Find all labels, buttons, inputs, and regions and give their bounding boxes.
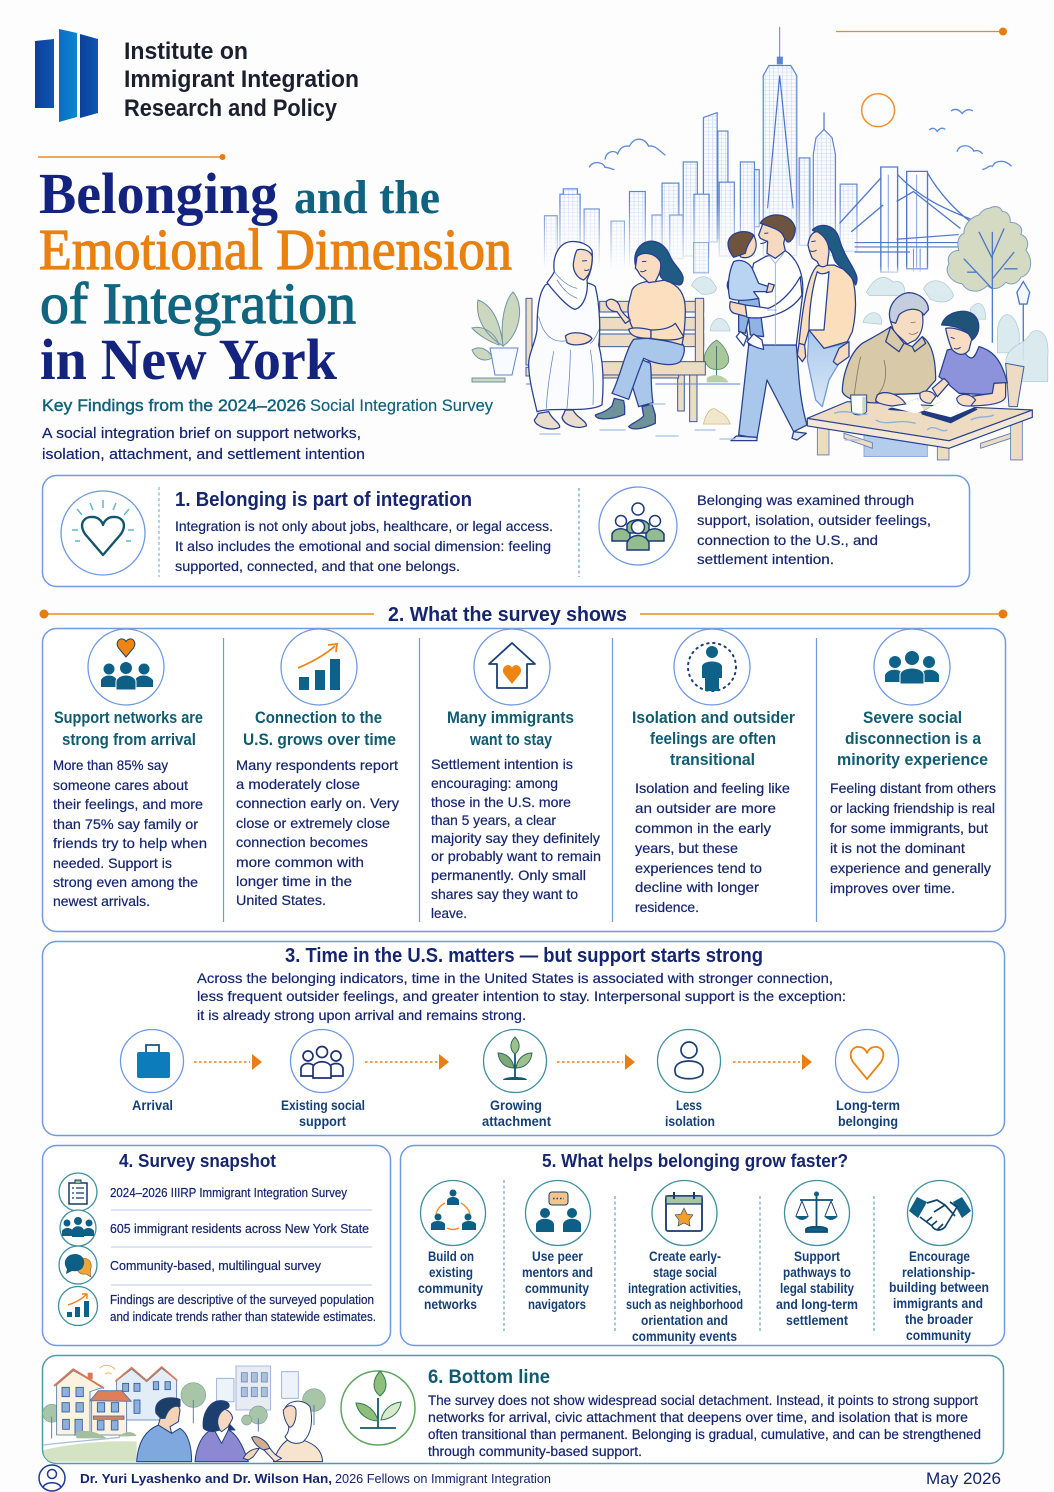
column: isolation is transitional: [632, 629, 796, 915]
heading: Connection to the: [255, 709, 382, 727]
body: newest arrivals.: [53, 893, 150, 909]
body: permanently. Only small: [431, 867, 586, 883]
item: early-stage activities: such as neighborhood: [626, 1297, 743, 1312]
body: encouraging: among: [431, 775, 558, 791]
icon: people with heart: [88, 629, 164, 705]
item: peer mentors: [522, 1180, 593, 1312]
item: survey name: 2024–2026 IIIRP Immigrant Integration Survey: [110, 1186, 348, 1200]
older man: [842, 293, 936, 406]
item: legal pathways: Support: [794, 1249, 840, 1264]
item: legal pathways: pathways to: [783, 1265, 851, 1280]
body: improves over time.: [830, 880, 955, 896]
top-right orange rule: [836, 28, 1007, 36]
panel 1: belonging is part of integration: [42, 476, 970, 586]
heading: [54, 709, 203, 749]
step: long-term belonging: Long-term: [836, 1098, 900, 1113]
heading: section 4: 4. Survey snapshot: [119, 1150, 276, 1171]
body: years, but these: [635, 840, 738, 856]
body: More than 85% say: [53, 757, 168, 773]
item: peer mentors: navigators: [528, 1297, 586, 1312]
title: [39, 161, 512, 392]
item: early-stage activities: community events: [632, 1329, 737, 1344]
heading: U.S. grows over time: [243, 731, 396, 749]
section 1 right text: connection to the U.S., and: [697, 532, 878, 548]
item: early-stage activities: [626, 1180, 743, 1344]
item: early-stage activities: orientation and: [641, 1313, 728, 1328]
title: in New York: [40, 327, 338, 392]
body: Isolation and feeling like: [635, 780, 790, 796]
heading: section 2 with orange rules: [40, 604, 1008, 626]
arrow: [194, 1054, 262, 1070]
section 1 right text: [697, 492, 931, 567]
step: long-term belonging: [836, 1030, 900, 1129]
hero illustration: New York skyline and people: [472, 27, 1048, 460]
panel 3: time in the U.S. matters: [42, 942, 1004, 1136]
item: early-stage activities: stage social: [653, 1265, 717, 1280]
item: sample size: 605 immigrant residents across New York State: [110, 1222, 369, 1236]
illustration: neighborhood and residents: [43, 1365, 325, 1462]
icon: rising bars: [281, 629, 357, 705]
intro text: [42, 425, 365, 463]
item: findings note: [58, 1286, 376, 1326]
heading: minority experience: [837, 751, 988, 769]
item: legal pathways: [776, 1180, 858, 1328]
logo wordmark: [124, 38, 359, 122]
section 1 body text: [175, 518, 553, 574]
heading: section 2 with orange rules: 2. What the survey shows: [388, 604, 627, 626]
heading: transitional: [670, 751, 755, 769]
body: more common with: [236, 854, 364, 870]
arrow: [365, 1054, 449, 1070]
body: or lacking friendship is real: [830, 800, 995, 816]
item: community-based survey: [59, 1246, 322, 1284]
item: build on networks: existing: [429, 1265, 473, 1280]
section 6 body text: through community-based support.: [428, 1444, 642, 1459]
section 3 body text: less frequent outsider feelings, and greater intention to stay. Interpersonal support is the exception:: [197, 988, 846, 1004]
step: growing attachment: [482, 1030, 551, 1129]
item: relationship-building: [889, 1180, 989, 1343]
column: connection grows: [236, 629, 399, 908]
body: United States.: [236, 892, 326, 908]
body: experiences tend to: [635, 860, 762, 876]
body: Feeling distant from others: [830, 780, 996, 796]
item: sample size: [60, 1210, 369, 1246]
step: growing attachment: attachment: [482, 1114, 551, 1129]
body: experience and generally: [830, 860, 991, 876]
body: needed. Support is: [53, 855, 172, 871]
icon: group of people: [599, 487, 677, 565]
authors: 2026 Fellows on Immigrant Integration: [335, 1472, 551, 1486]
item: legal pathways: legal stability: [780, 1281, 854, 1296]
title: Belonging: [39, 161, 278, 226]
body: connection becomes: [236, 834, 368, 850]
section 6 body text: networks for arrival, civic attachment that deepens over time, and isolation that is more: [428, 1410, 968, 1425]
column: support networks: [53, 629, 207, 909]
date: May 2026: [926, 1470, 1001, 1488]
step: less isolation: [658, 1030, 720, 1129]
heading: Support networks are: [54, 709, 203, 727]
item: relationship-building: Encourage: [909, 1249, 970, 1264]
heading: disconnection is a: [845, 730, 982, 748]
item: findings note: and indicate trends rather than statewide estimates.: [110, 1310, 376, 1324]
section 6 body text: The survey does not show widespread social detachment. Instead, it points to strong support: [428, 1393, 978, 1408]
icon: sprout: [341, 1371, 415, 1445]
heading: Many immigrants: [447, 709, 574, 727]
item: peer mentors: Use peer: [532, 1249, 584, 1264]
arrow: [557, 1054, 635, 1070]
item: build on networks: networks: [424, 1297, 477, 1312]
mother: [797, 225, 857, 407]
body: [236, 757, 399, 908]
body: friends try to help when: [53, 835, 207, 851]
item: findings note: Findings are descriptive of the surveyed population: [110, 1293, 374, 1307]
body: Settlement intention is: [431, 756, 573, 772]
body: [431, 756, 601, 921]
section 3 body text: [197, 970, 846, 1023]
item: peer mentors: community: [525, 1281, 589, 1296]
arrow: [733, 1054, 812, 1070]
subtitle: Social Integration Survey: [310, 396, 493, 415]
authors: [80, 1472, 551, 1486]
heading: want to stay: [469, 731, 553, 749]
houses: [54, 1367, 177, 1435]
step: arrival: [120, 1030, 184, 1113]
title: and the: [294, 171, 440, 224]
item: survey name: [59, 1173, 348, 1211]
residents: [137, 1398, 323, 1462]
heading: feelings are often: [650, 730, 776, 748]
body: or probably want to remain: [431, 848, 601, 864]
heading: Isolation and outsider: [632, 709, 796, 727]
logo wordmark: Immigrant Integration: [124, 66, 359, 93]
background buildings and trees: [217, 1366, 298, 1410]
section 3 body text: it is already strong upon arrival and remains strong.: [197, 1007, 526, 1023]
heading: section 5: 5. What helps belonging grow faster?: [542, 1150, 848, 1171]
logo wordmark: Institute on: [124, 38, 248, 65]
body: an outsider are more: [635, 800, 776, 816]
timeline: [120, 1030, 900, 1129]
panel 6: bottom line: [42, 1356, 1004, 1464]
icon: author: [39, 1465, 65, 1491]
section 1 body text: Integration is not only about jobs, healthcare, or legal access.: [175, 518, 553, 534]
heading: [243, 709, 396, 749]
boy: [932, 311, 1007, 406]
heading: section 3: 3. Time in the U.S. matters — but support starts strong: [285, 945, 763, 967]
section 6 body text: [428, 1393, 981, 1459]
seated women on bench: [526, 241, 740, 429]
item: community-based survey: Community-based, multilingual survey: [110, 1259, 322, 1273]
item: build on networks: Build on: [428, 1249, 474, 1264]
heading: section 6: 6. Bottom line: [428, 1367, 550, 1388]
body: for some immigrants, but: [830, 820, 988, 836]
body: [635, 780, 790, 915]
icon: three people: [874, 629, 950, 705]
top-left orange rule: [38, 154, 226, 160]
bench: [526, 298, 705, 422]
body: common in the early: [635, 820, 771, 836]
body: connection early on. Very: [236, 795, 399, 811]
section 1 right text: settlement intention.: [697, 551, 834, 567]
intro text: A social integration brief on support networks,: [42, 425, 361, 442]
step: less isolation: isolation: [665, 1114, 715, 1129]
body: it is not the dominant: [830, 840, 965, 856]
potted plant: [472, 292, 520, 382]
city backdrop: [544, 27, 1048, 424]
mother and reading pair at table: [797, 225, 1032, 460]
item: relationship-building: immigrants and: [893, 1296, 983, 1311]
column: severe disconnection: [830, 629, 996, 896]
step: existing social support: [281, 1030, 365, 1129]
body: Many respondents report: [236, 757, 398, 773]
item: early-stage activities: integration activities,: [628, 1281, 741, 1296]
heading: [837, 709, 988, 769]
item: early-stage activities: Create early-: [649, 1249, 721, 1264]
logo: institute: [35, 29, 359, 122]
item: build on networks: [418, 1180, 486, 1312]
step: existing social support: support: [299, 1114, 346, 1129]
step: growing attachment: Growing: [490, 1098, 542, 1113]
body: strong even among the: [53, 874, 198, 890]
heading: Severe social: [863, 709, 962, 727]
icon: glowing heart: [61, 491, 145, 575]
section 3 body text: Across the belonging indicators, time in the United States is associated with stronger connection,: [197, 970, 833, 986]
item: relationship-building: community: [906, 1328, 971, 1343]
section 1 body text: supported, connected, and that one belongs.: [175, 558, 460, 574]
item: relationship-building: relationship-: [902, 1265, 975, 1280]
title: Emotional Dimension: [39, 217, 512, 282]
body: their feelings, and more: [53, 796, 203, 812]
woman in hijab: [529, 241, 603, 429]
heading: [632, 709, 796, 769]
body: shares say they want to: [431, 886, 578, 902]
item: peer mentors: mentors and: [522, 1265, 593, 1280]
heading: [447, 709, 574, 749]
panel 2: what the survey shows: [42, 628, 1006, 932]
chair: [1006, 363, 1024, 407]
subtitle: [42, 396, 493, 415]
item: build on networks: community: [418, 1281, 483, 1296]
icon: house with heart: [474, 629, 550, 705]
body: majority say they definitely: [431, 830, 600, 846]
body: close or extremely close: [236, 815, 390, 831]
heading: strong from arrival: [62, 731, 196, 749]
step: arrival: Arrival: [132, 1098, 173, 1113]
body: leave.: [431, 905, 467, 921]
body: than 5 years, a clear: [431, 812, 556, 828]
body: [53, 757, 207, 909]
ground strokes: [540, 404, 860, 440]
section 1 right text: Belonging was examined through: [697, 492, 914, 508]
body: those in the U.S. more: [431, 794, 571, 810]
authors: Dr. Yuri Lyashenko and Dr. Wilson Han,: [80, 1472, 332, 1486]
step: existing social support: Existing social: [281, 1098, 365, 1113]
body: than 75% say family or: [53, 816, 198, 832]
footer: [39, 1465, 1001, 1491]
step: less isolation: Less: [676, 1098, 702, 1113]
body: someone cares about: [53, 777, 188, 793]
title: of Integration: [40, 271, 356, 336]
table legs and chairs: [817, 422, 1022, 460]
heading: section 1: 1. Belonging is part of integration: [175, 489, 472, 511]
body: longer time in the: [236, 873, 352, 889]
section 6 body text: often transitional than permanent. Belonging is gradual, cumulative, and can be strengthened: [428, 1427, 981, 1442]
logo wordmark: Research and Policy: [124, 95, 338, 122]
woman in peach sweater: [595, 241, 685, 429]
item: legal pathways: settlement: [786, 1313, 848, 1328]
item: legal pathways: and long-term: [776, 1297, 858, 1312]
item: relationship-building: building between: [889, 1280, 989, 1295]
column: many want to stay: [431, 629, 601, 921]
panel 4: survey snapshot: [42, 1146, 390, 1346]
logo mark: [35, 29, 98, 122]
intro text: isolation, attachment, and settlement intention: [42, 446, 365, 463]
section 1 right text: support, isolation, outsider feelings,: [697, 512, 931, 528]
subtitle: Key Findings from the 2024–2026: [42, 396, 306, 415]
icon: person in dotted ring: [674, 629, 750, 705]
section 1 body text: It also includes the emotional and social dimension: feeling: [175, 538, 551, 554]
father carrying child: [727, 215, 807, 441]
body: residence.: [635, 899, 699, 915]
body: a moderately close: [236, 776, 360, 792]
body: [830, 780, 996, 896]
panel 5: what helps belonging grow faster: [400, 1146, 1004, 1346]
item: relationship-building: the broader: [905, 1312, 974, 1327]
body: decline with longer: [635, 879, 759, 895]
tabletop with book and mug: [807, 391, 1032, 448]
step: long-term belonging: belonging: [838, 1114, 898, 1129]
